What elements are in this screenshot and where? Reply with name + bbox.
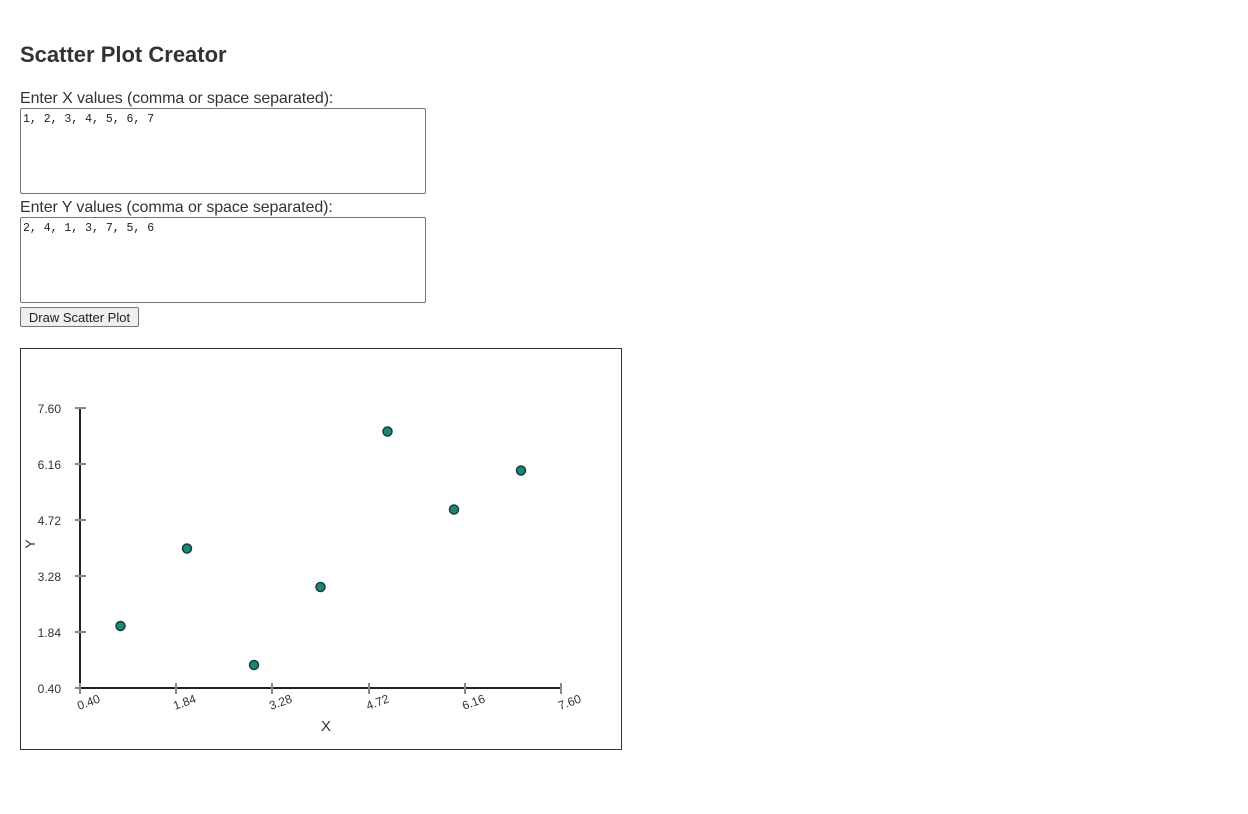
textarea: x values [20,108,426,194]
data points [116,427,526,670]
textarea: y values [20,217,426,303]
button: draw [20,307,139,327]
y axis [22,402,86,696]
x axis: 0.40 [75,692,102,713]
label: y values: Enter Y values (comma or space separated): [20,199,333,216]
textarea: y values: 2, 4, 1, 3, 7, 5, 6 [23,222,154,235]
x axis: 7.60 [556,692,583,713]
y axis: Y [22,539,38,549]
y axis: 3.28 [38,570,61,584]
x axis: 4.72 [364,692,391,713]
label: x values: Enter X values (comma or space separated): [20,90,333,107]
y axis: 7.60 [38,402,61,416]
x axis: 1.84 [171,692,198,713]
x axis: 6.16 [460,692,487,713]
y axis: 6.16 [38,458,61,472]
title: Scatter Plot Creator [20,42,227,67]
button: draw: Draw Scatter Plot [29,310,130,325]
x axis: 3.28 [267,692,294,713]
textarea: x values: 1, 2, 3, 4, 5, 6, 7 [23,113,154,126]
x axis: X [321,718,331,735]
y axis: 0.40 [38,682,61,696]
scatter chart [20,348,622,750]
x axis [75,683,583,735]
y axis: 1.84 [38,626,61,640]
y axis: 4.72 [38,514,61,528]
